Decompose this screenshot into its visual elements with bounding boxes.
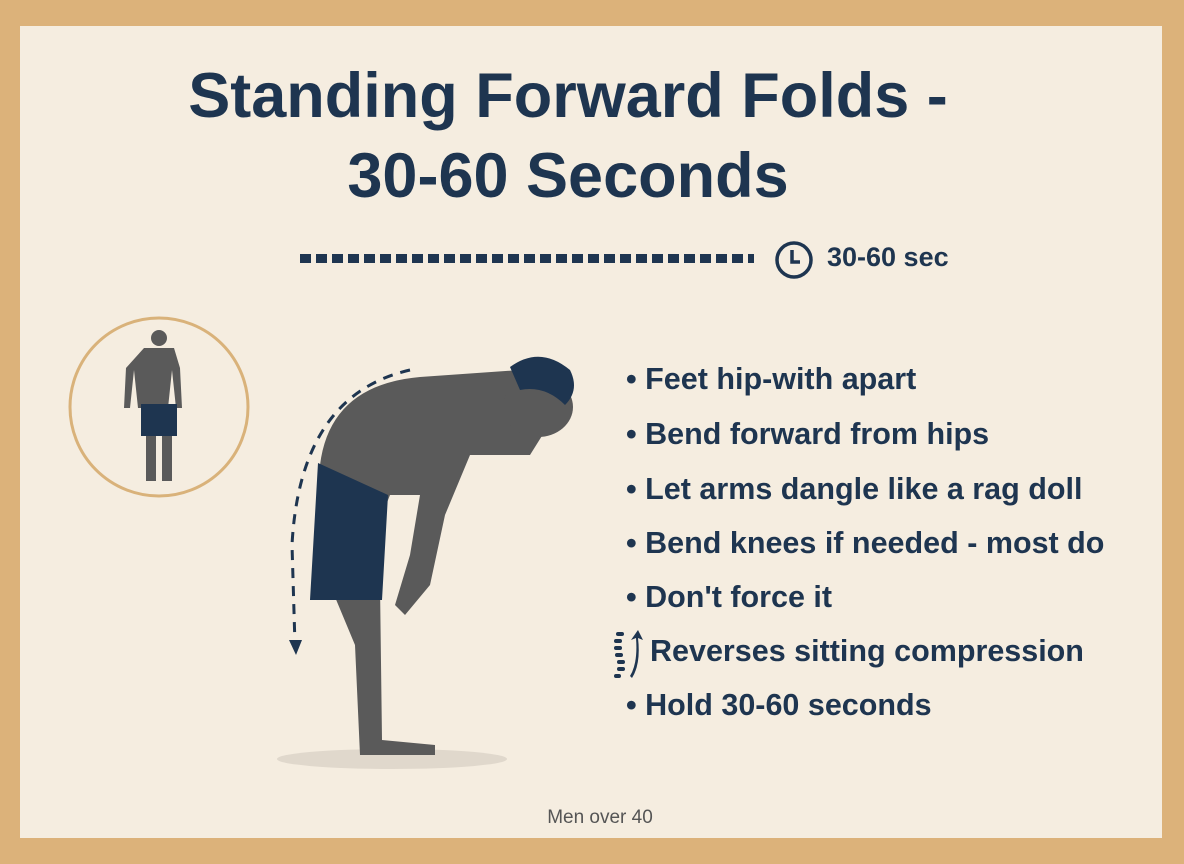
text: • Feet hip-with apart: [626, 362, 916, 396]
icon: spine arrow: [614, 630, 643, 678]
text: • Hold 30-60 seconds: [626, 688, 932, 722]
text: • Let arms dangle like a rag doll: [626, 472, 1082, 506]
timer bar: [300, 241, 949, 279]
text: • Bend knees if needed - most do: [626, 526, 1104, 560]
icon: standing man in circle: [68, 316, 250, 498]
title: Standing Forward Folds -: [188, 61, 948, 131]
text: • Bend forward from hips: [626, 417, 989, 451]
text: • Don't force it: [626, 580, 832, 614]
title: 30-60 Seconds: [347, 141, 789, 211]
text: Reverses sitting compression: [650, 634, 1084, 668]
timer bar: 30-60 sec: [827, 242, 949, 272]
title: [188, 61, 948, 211]
footer: Men over 40: [547, 807, 653, 828]
illustration: forward fold: [277, 356, 574, 769]
icon: clock: [777, 243, 811, 277]
list: [626, 362, 1104, 722]
